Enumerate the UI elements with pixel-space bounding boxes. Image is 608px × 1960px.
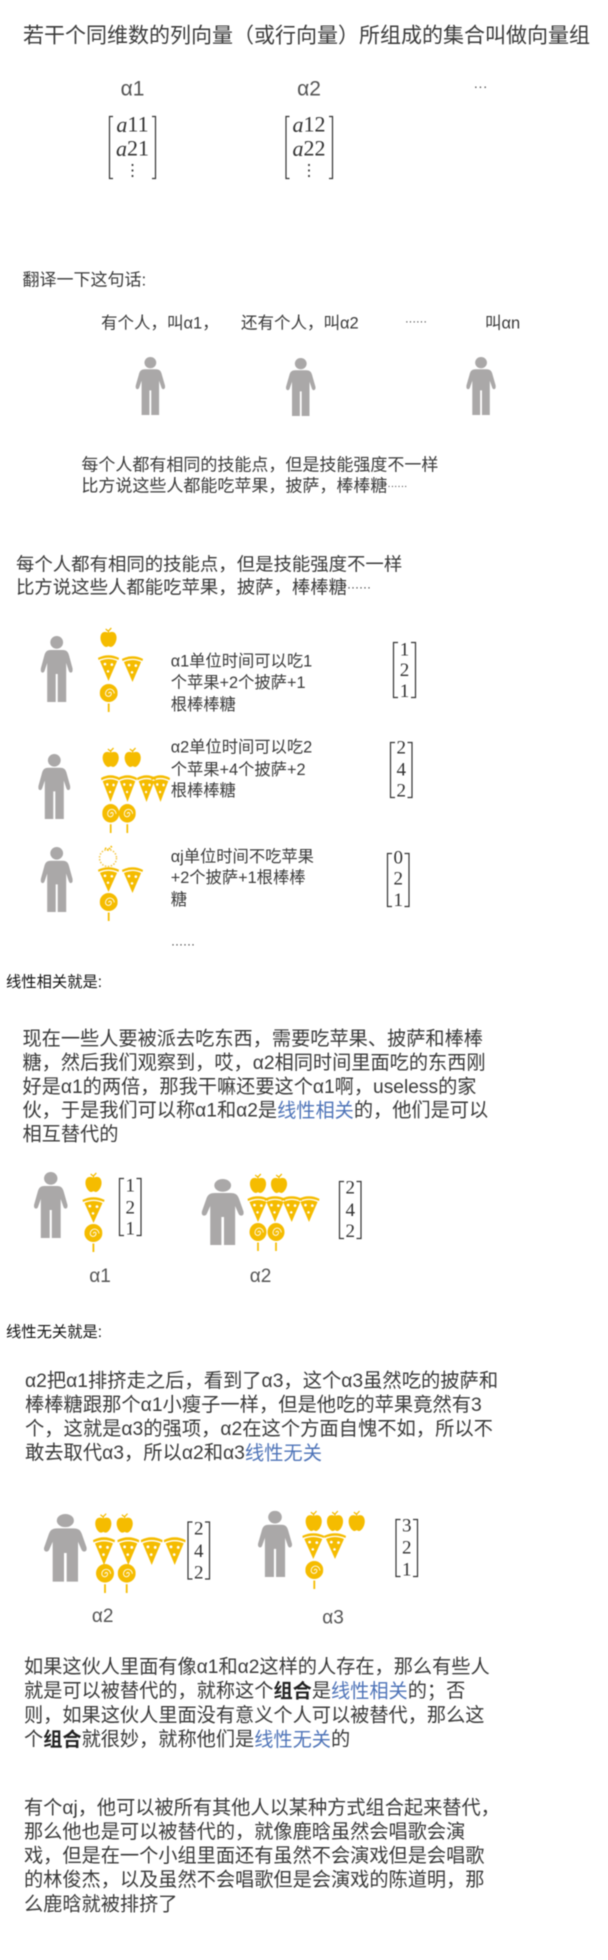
matrix α1	[110, 112, 156, 180]
food icons	[98, 846, 143, 921]
text block: skill points: 每个人都有相同的技能点，但是技能强度不一样	[16, 554, 402, 574]
title: 若干个同维数的列向量（或行向量）所组成的集合叫做向量组	[23, 24, 590, 48]
comparison figure: α2 again	[44, 1514, 210, 1627]
matrix	[388, 848, 409, 911]
text block: skill points (indented)	[81, 456, 438, 496]
label: α2	[250, 1266, 271, 1287]
people labels: ······	[405, 316, 427, 328]
description: α1单位时间可以吃1	[171, 653, 312, 671]
matrix α1: a21	[116, 136, 149, 160]
matrix α2	[286, 112, 332, 180]
description: 根棒棒糖	[171, 782, 236, 800]
row: α2	[38, 738, 412, 833]
text block: summary of combinations: 就是可以被替代的，就称这个组合是线性相关的；否	[24, 1680, 465, 1702]
matrix: 1	[125, 1218, 135, 1240]
text block: summary of combinations: 个组合就很妙，就称他们是线性无关的	[24, 1728, 350, 1750]
text block: skill points: 比方说这些人都能吃苹果，披萨，棒棒糖······	[16, 576, 371, 598]
matrix: 1	[400, 640, 409, 660]
matrix	[340, 1178, 361, 1242]
person icon	[202, 1179, 244, 1245]
matrix α2: a12	[292, 112, 326, 136]
matrix: 4	[194, 1541, 204, 1562]
label: α2	[92, 1606, 113, 1627]
comparison figure: α1	[34, 1172, 141, 1287]
matrix: 2	[400, 660, 409, 681]
text block: αj analogy: 戏，但是在一个小组里面还有虽然不会演戏但是会唱歌	[24, 1845, 484, 1867]
comparison figure: α2	[202, 1174, 361, 1287]
description: α2单位时间可以吃2	[171, 739, 312, 757]
matrix: 1	[402, 1560, 411, 1580]
matrix α1: ⋮	[124, 162, 140, 180]
text block: linear independence explanation: α2把α1排挤走之后，看到了α3，这个α3虽然吃的披萨和	[25, 1370, 498, 1392]
text block: linear dependence explanation: 伙，于是我们可以称α1和α2是线性相关的，他们是可以	[22, 1100, 488, 1122]
matrix: 4	[345, 1200, 355, 1221]
matrix: 2	[345, 1178, 355, 1198]
person icon	[34, 1172, 68, 1238]
text block: summary of combinations	[24, 1656, 490, 1750]
people labels	[101, 314, 520, 332]
matrix: 2	[402, 1538, 411, 1558]
matrix: 1	[393, 890, 403, 911]
matrix: 4	[396, 760, 406, 780]
matrix: 2	[194, 1562, 204, 1584]
person icon	[258, 1511, 292, 1577]
text block: linear dependence explanation: 糖，然后我们观察到，哎，α2相同时间里面吃的东西刚	[22, 1052, 486, 1074]
text block: summary of combinations: 如果这伙人里面有像α1和α2这样的人存在，那么有些人	[24, 1656, 490, 1678]
description: 根棒棒糖	[171, 696, 236, 714]
text block: linear independence explanation: 棒棒糖跟那个α1小瘦子一样，但是他吃的苹果竟然有3	[25, 1394, 482, 1416]
matrix: 2	[393, 868, 403, 890]
heading: linear independence: 线性无关就是:	[6, 1324, 102, 1341]
food icons	[302, 1511, 365, 1589]
matrix α2: a22	[292, 136, 326, 160]
food icons	[98, 628, 143, 712]
description: αj单位时间不吃苹果	[171, 848, 314, 866]
description: 个苹果+4个披萨+2	[171, 761, 306, 779]
people labels: 有个人，叫α1，	[101, 314, 219, 332]
ellipsis: ······	[171, 937, 195, 951]
text block: skill points (indented): 比方说这些人都能吃苹果，披萨，棒棒糖······	[81, 476, 407, 496]
text block: αj analogy: 的林俊杰，以及虽然不会唱歌但是会演戏的陈道明，那	[24, 1869, 484, 1891]
text block: linear independence explanation: 个，这就是α3的强项，α2在这个方面自愧不如，所以不	[25, 1418, 493, 1440]
food icons	[82, 1173, 104, 1252]
food icons	[248, 1174, 320, 1251]
heading: linear dependence: 线性相关就是:	[6, 974, 102, 991]
matrix α1: a11	[116, 112, 149, 136]
text block: αj analogy: 么鹿晗就被排挤了	[24, 1894, 178, 1916]
row: α1	[41, 628, 416, 714]
matrix: 1	[125, 1176, 135, 1196]
matrix: 2	[396, 738, 406, 758]
vector α2	[286, 78, 332, 180]
food icons	[93, 1514, 186, 1593]
text block: skill points	[16, 554, 402, 598]
matrix: 1	[400, 681, 409, 702]
person icon	[44, 1514, 87, 1582]
matrix: 2	[194, 1518, 204, 1540]
text block: summary of combinations: 则，如果这伙人里面没有意义个人可以被替代，那么这	[24, 1704, 484, 1726]
text block: αj analogy: 那么他也是可以被替代的，就像鹿晗虽然会唱歌会演	[24, 1821, 465, 1843]
text block: linear dependence explanation	[22, 1028, 488, 1146]
ellipsis: ···	[474, 78, 488, 94]
text block: skill points (indented): 每个人都有相同的技能点，但是技能强度不一样	[81, 456, 438, 474]
matrix	[188, 1518, 210, 1584]
text block: linear dependence explanation: 现在一些人要被派去吃东西，需要吃苹果、披萨和棒棒	[22, 1028, 483, 1050]
person icon	[38, 754, 70, 819]
description: +2个披萨+1根棒棒	[171, 869, 306, 887]
people icons row	[136, 357, 496, 416]
label: α1	[89, 1266, 111, 1287]
food icons	[101, 748, 170, 833]
matrix: 2	[345, 1221, 355, 1242]
matrix: 0	[393, 848, 403, 868]
matrix: 3	[402, 1516, 411, 1536]
heading: translate: 翻译一下这句话:	[22, 270, 146, 290]
people labels: 叫αn	[485, 314, 520, 332]
matrix	[120, 1176, 141, 1240]
person icon	[41, 636, 73, 702]
text block: linear dependence explanation: 相互替代的	[22, 1124, 118, 1146]
matrix	[394, 640, 416, 702]
vector α1	[110, 78, 156, 180]
matrix: 2	[125, 1198, 135, 1218]
text block: linear dependence explanation: 好是α1的两倍，那我干嘛还要这个α1啊，useless的家	[22, 1076, 476, 1098]
row: αj	[41, 846, 409, 921]
description	[171, 848, 314, 909]
text block: linear independence explanation	[25, 1370, 498, 1464]
comparison figure: α3	[258, 1511, 418, 1628]
people labels: 还有个人，叫α2	[241, 314, 359, 332]
matrix: 2	[396, 780, 406, 802]
label: α3	[322, 1608, 344, 1628]
description: 糖	[171, 891, 187, 909]
matrix	[390, 738, 412, 802]
label α1: α1	[121, 78, 144, 100]
text block: linear independence explanation: 敢去取代α3，所以α2和α3线性无关	[25, 1442, 322, 1464]
description: 个苹果+2个披萨+1	[171, 674, 306, 692]
text block: αj analogy: 有个αj，他可以被所有其他人以某种方式组合起来替代，	[24, 1797, 500, 1819]
label α2: α2	[297, 78, 321, 100]
description	[171, 653, 312, 714]
description	[171, 739, 312, 800]
person icon	[41, 847, 73, 912]
text block: αj analogy	[24, 1797, 500, 1916]
matrix α2: ⋮	[301, 162, 317, 180]
matrix	[396, 1516, 418, 1580]
